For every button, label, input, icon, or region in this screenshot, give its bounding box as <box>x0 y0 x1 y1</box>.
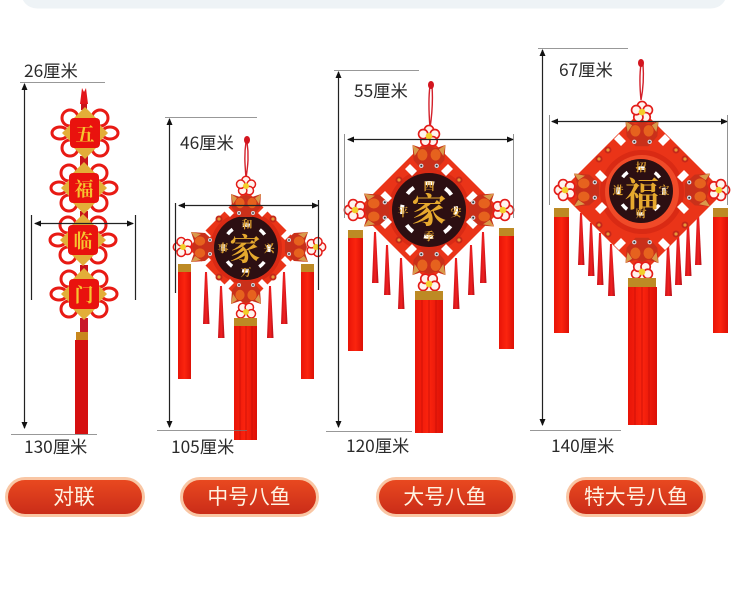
small tassels <box>203 272 288 338</box>
diamond frame <box>357 138 501 282</box>
button: couplet <box>6 478 144 516</box>
center plaque: 兴 <box>264 240 276 256</box>
small tassels <box>372 232 486 309</box>
top panel remnant <box>21 0 727 8</box>
center plaque: 安 <box>450 204 462 220</box>
fish ornaments <box>344 125 514 295</box>
connectors <box>80 104 88 273</box>
hanger cord <box>244 136 250 178</box>
knot: 门: 门 <box>74 280 94 308</box>
small tassels <box>578 213 702 296</box>
knot: 福: 福 <box>74 174 94 202</box>
center tassel <box>234 318 257 440</box>
knot: 五 <box>52 107 118 159</box>
dimensions: extra-large <box>530 48 728 457</box>
knot: 临: 临 <box>73 226 93 254</box>
knot: 门 <box>51 268 117 320</box>
center plaque: 招 <box>636 159 646 175</box>
dimensions: medium <box>157 118 318 458</box>
side tassels <box>554 208 728 333</box>
center plaque: 财 <box>636 205 646 221</box>
dimensions: couplet <box>11 57 136 458</box>
center plaque: 四 <box>424 178 434 194</box>
center plaque: 家 <box>230 224 260 270</box>
center plaque: 宝 <box>658 182 670 198</box>
fish ornaments <box>554 101 730 283</box>
hanger cord <box>428 81 434 128</box>
height label: 140厘米 <box>551 432 614 457</box>
knot: 临 <box>50 214 116 266</box>
product: couplet knot <box>50 88 118 434</box>
button: large <box>378 478 514 516</box>
product: large eight-fish knot <box>344 81 514 433</box>
center plaque <box>609 159 673 223</box>
height label: 130厘米 <box>24 433 87 458</box>
width label: 46厘米 <box>180 129 234 154</box>
fish ornaments <box>173 176 326 322</box>
width label: 67厘米 <box>559 56 613 81</box>
center plaque: 家 <box>411 184 447 234</box>
center tassel <box>628 278 657 425</box>
diamond frame <box>188 190 304 306</box>
center plaque: 季 <box>424 228 434 244</box>
button: medium <box>182 478 318 516</box>
center plaque: 事 <box>218 240 228 256</box>
center plaque <box>214 216 278 280</box>
product: extra-large eight-fish knot <box>554 59 730 425</box>
side tassels <box>178 264 314 379</box>
width label: 26厘米 <box>24 57 78 82</box>
couplet tassel <box>75 318 88 434</box>
height label: 120厘米 <box>346 432 409 457</box>
center plaque: 万 <box>240 264 252 280</box>
center plaque: 进 <box>612 182 624 198</box>
button: extra-large: 特大号八鱼 <box>584 480 688 510</box>
center plaque: 福 <box>625 168 659 216</box>
knot: 福 <box>51 162 117 214</box>
hanger loop <box>80 88 88 104</box>
diamond frame <box>560 110 724 274</box>
dimensions: large <box>326 70 514 457</box>
width label: 55厘米 <box>354 77 408 102</box>
button: medium: 中号八鱼 <box>207 480 291 510</box>
button: extra-large <box>568 478 704 516</box>
side tassels <box>348 228 514 351</box>
center plaque <box>392 173 466 247</box>
center plaque: 和 <box>242 216 252 232</box>
button: large: 大号八鱼 <box>403 480 487 510</box>
knot: 五: 五 <box>75 120 95 146</box>
center tassel <box>415 291 443 433</box>
product: medium eight-fish knot <box>173 136 326 440</box>
hanger cord <box>638 59 644 100</box>
height label: 105厘米 <box>171 433 234 458</box>
center plaque: 平 <box>398 204 408 220</box>
button: couplet: 对联 <box>53 480 95 510</box>
